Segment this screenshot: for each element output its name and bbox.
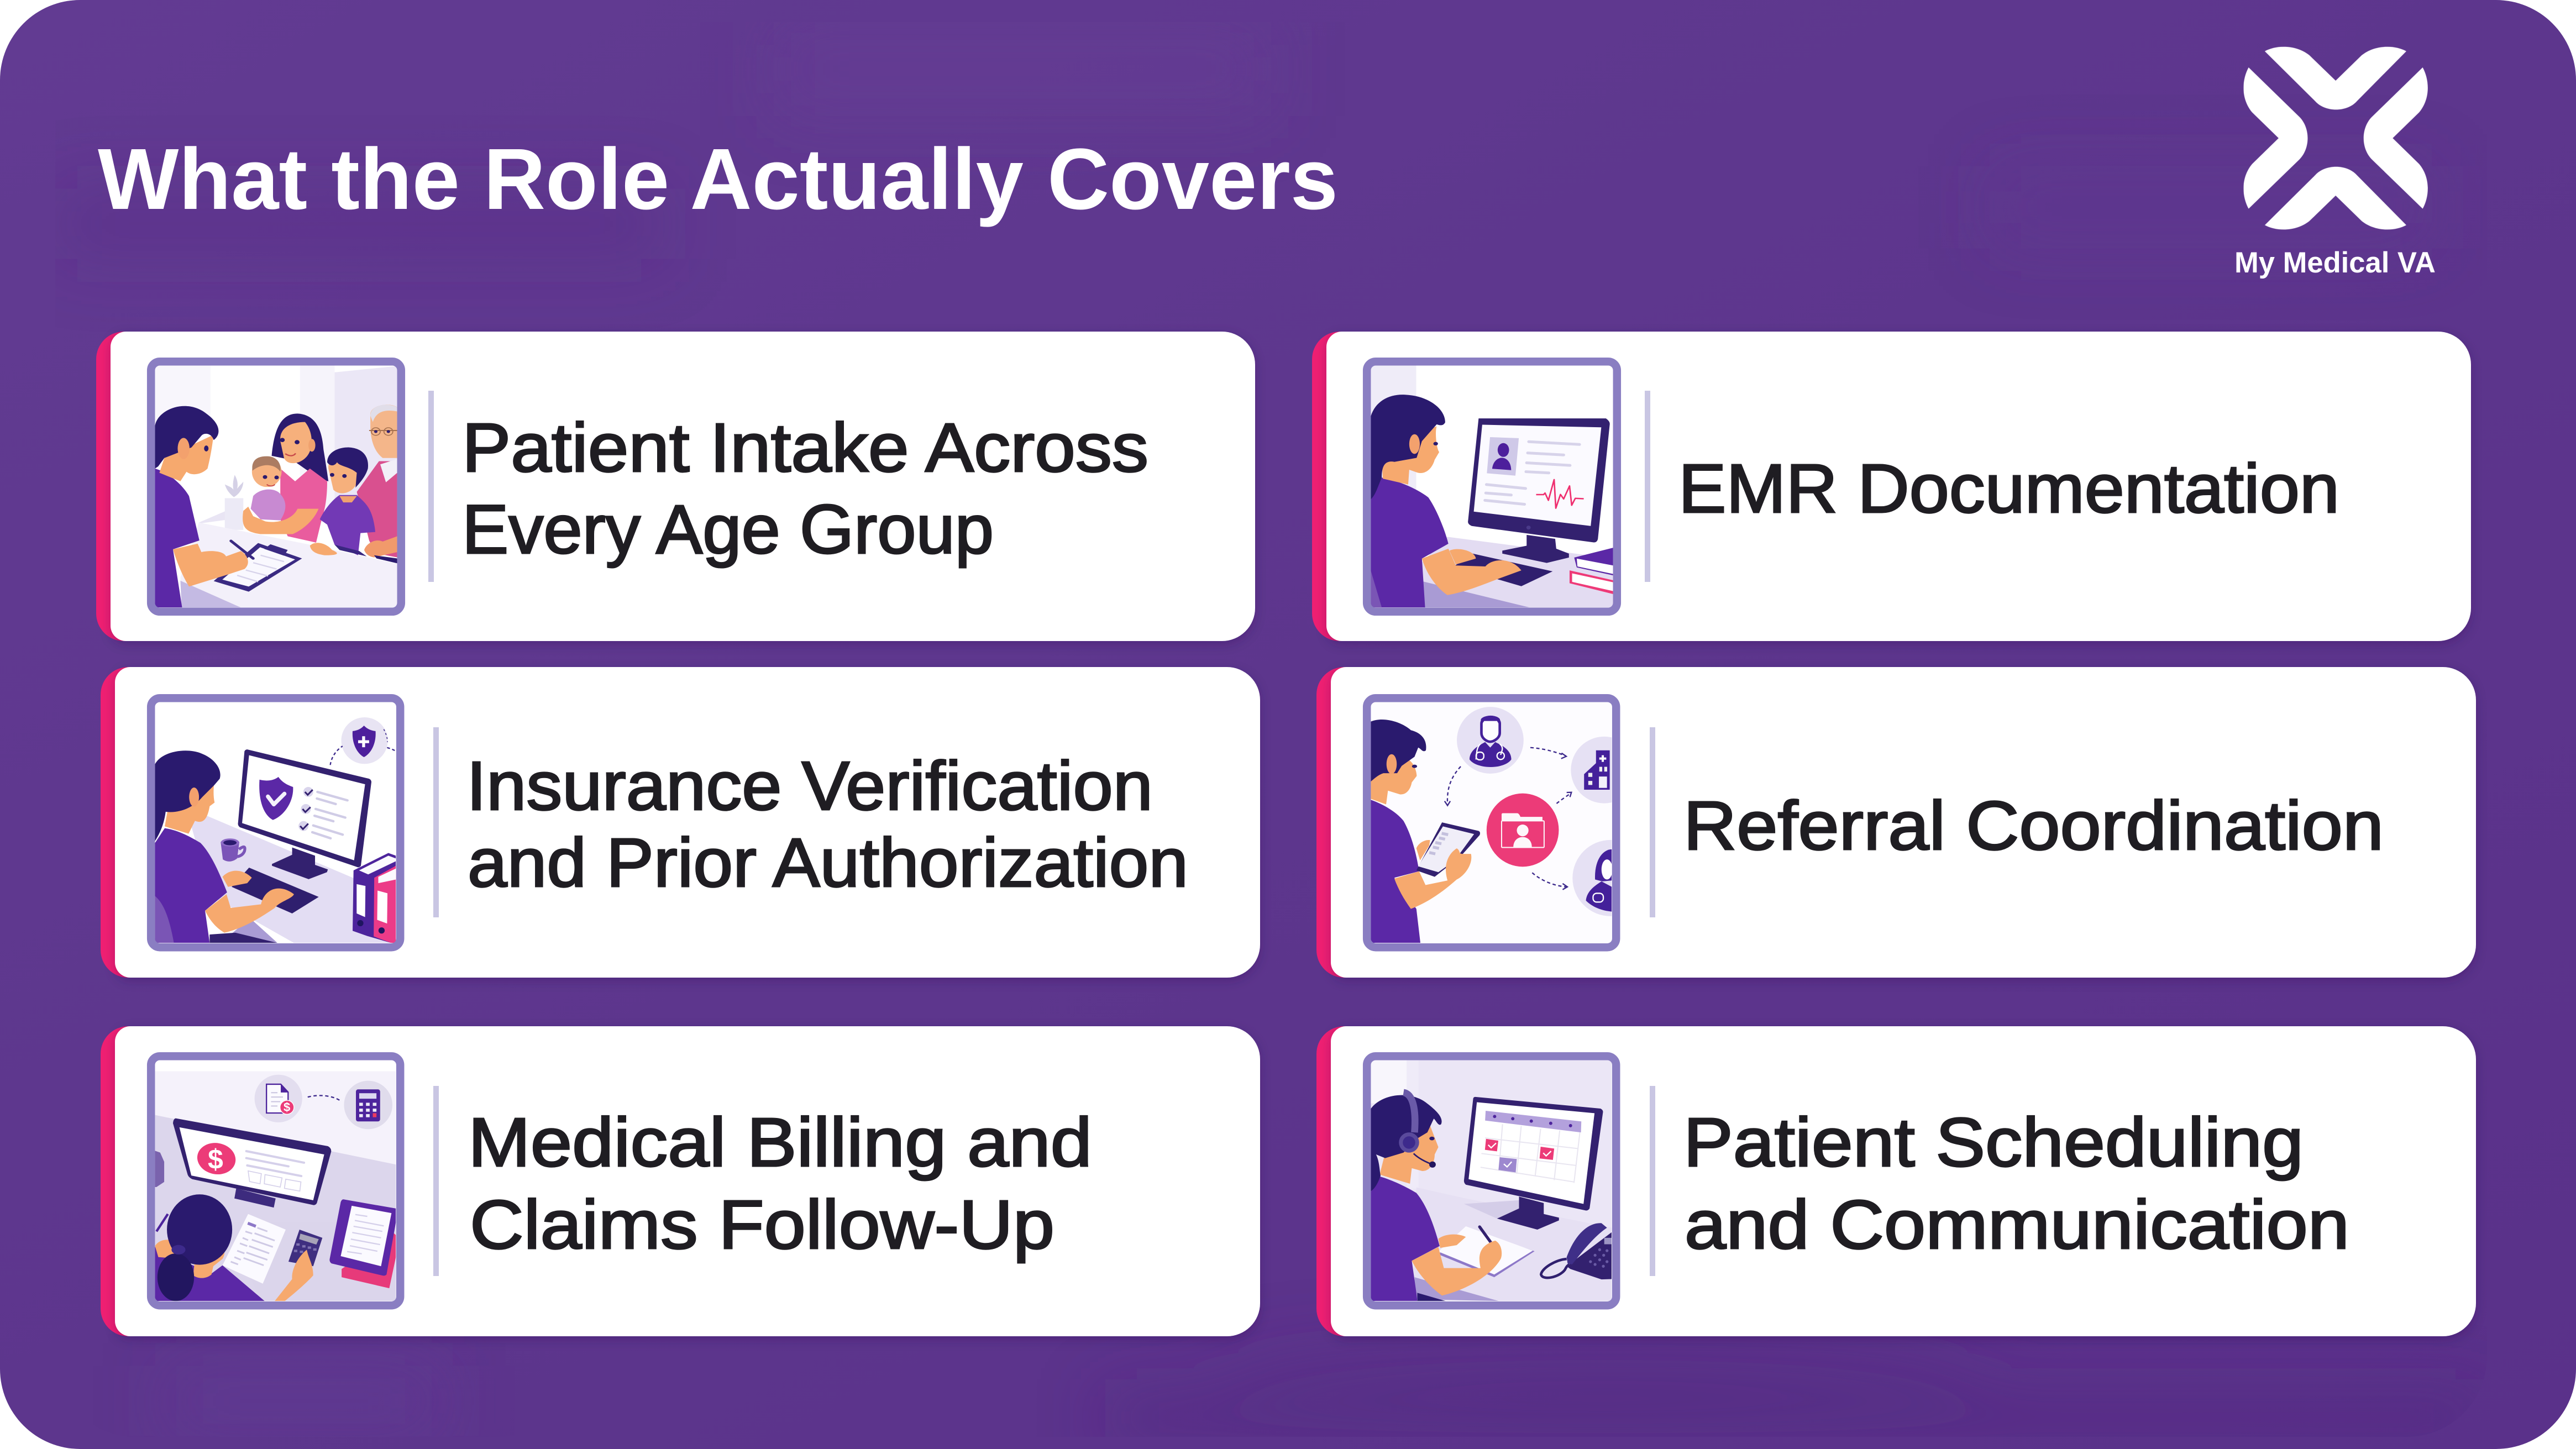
plant	[155, 1151, 164, 1187]
label text: Insurance Verification	[466, 748, 1153, 825]
card body	[115, 1026, 1260, 1336]
books	[1570, 570, 1613, 594]
label text: Patient Scheduling	[1683, 1104, 2304, 1181]
label text: Every Age Group	[462, 491, 994, 568]
divider	[428, 391, 434, 582]
label text: and Prior Authorization	[468, 825, 1188, 901]
label text	[466, 748, 1188, 901]
illustration: typing patient record	[1371, 366, 1613, 608]
logo wordmark: My Medical VA	[2234, 246, 2436, 279]
binders	[353, 853, 396, 943]
tablet	[1416, 822, 1480, 877]
card accent	[96, 332, 262, 641]
physician node	[1572, 840, 1649, 916]
panel: medical billing	[101, 1026, 1260, 1336]
label text	[1683, 1104, 2349, 1263]
hospital node	[1571, 737, 1638, 804]
clipboard	[214, 543, 302, 592]
image frame	[1367, 361, 1617, 612]
image frame	[151, 361, 401, 612]
calculator node	[344, 1081, 392, 1129]
mug	[237, 847, 245, 857]
notebook	[1439, 1228, 1535, 1277]
card body	[111, 332, 1255, 641]
illustration: billing desk from above	[155, 1071, 396, 1301]
label text: Referral Coordination	[1683, 788, 2384, 864]
arrows	[1445, 748, 1571, 890]
dollar sign on invoice: $	[284, 1100, 290, 1114]
panel: insurance verification	[101, 667, 1260, 978]
image frame	[1367, 698, 1616, 947]
image frame	[151, 698, 400, 947]
boy	[320, 495, 375, 555]
paper	[223, 1214, 286, 1284]
divider	[1650, 727, 1655, 917]
label text	[468, 1104, 1092, 1263]
card accent	[1316, 667, 1482, 978]
label text: and Communication	[1685, 1186, 2349, 1263]
panel: patient scheduling	[1316, 1026, 2476, 1336]
label text: Claims Follow-Up	[470, 1186, 1054, 1263]
folder node	[1487, 794, 1559, 867]
illustration: scheduling with headset	[1371, 1060, 1612, 1301]
divider	[1645, 391, 1650, 582]
card accent	[101, 1026, 266, 1336]
woman	[272, 413, 328, 481]
calculator	[288, 1230, 322, 1266]
pen	[156, 1214, 168, 1231]
person	[155, 828, 227, 943]
illustration: referral network with tablet	[1371, 707, 1612, 943]
panel: EMR documentation	[1312, 332, 2471, 641]
label text	[462, 410, 1148, 568]
panel: patient intake	[96, 332, 1255, 641]
card accent	[1312, 332, 1478, 641]
panel: referral coordination	[1316, 667, 2476, 978]
label text: Patient Intake Across	[462, 410, 1148, 486]
person	[1371, 800, 1420, 943]
image frame	[1367, 1056, 1616, 1305]
divider	[433, 727, 439, 917]
table	[180, 522, 397, 607]
headset	[1404, 1093, 1415, 1132]
card accent	[101, 667, 266, 978]
title: What the Role Actually Covers	[98, 131, 1338, 228]
person	[155, 1247, 265, 1301]
person	[1371, 1177, 1440, 1301]
arm holding baby	[243, 507, 318, 534]
divider	[1650, 1086, 1655, 1276]
phone	[1567, 1232, 1612, 1279]
keyboard	[232, 868, 319, 914]
person	[1371, 477, 1449, 607]
baby	[251, 490, 285, 521]
monitor	[1497, 1196, 1559, 1230]
card body	[1331, 667, 2476, 978]
nurse	[155, 469, 200, 607]
label text: EMR Documentation	[1678, 450, 2339, 527]
doc node	[255, 1075, 302, 1122]
arms	[1412, 1241, 1502, 1295]
logo: My Medical VA	[2234, 47, 2436, 279]
divider	[433, 1086, 439, 1276]
illustration: receptionist with family	[155, 366, 397, 608]
icon: logo mark	[2244, 46, 2428, 230]
card body	[115, 667, 1260, 978]
card body	[1326, 332, 2471, 641]
illustration: insurance check at desk	[155, 717, 396, 943]
card accent	[1316, 1026, 1482, 1336]
dollar sign on monitor: $	[208, 1144, 223, 1175]
doctor node	[1457, 707, 1524, 774]
card body	[1331, 1026, 2476, 1336]
label text: Medical Billing and	[468, 1104, 1092, 1181]
image frame	[151, 1056, 400, 1305]
older man	[357, 461, 397, 558]
tablet stack	[342, 1233, 396, 1288]
monitor	[234, 1188, 276, 1208]
